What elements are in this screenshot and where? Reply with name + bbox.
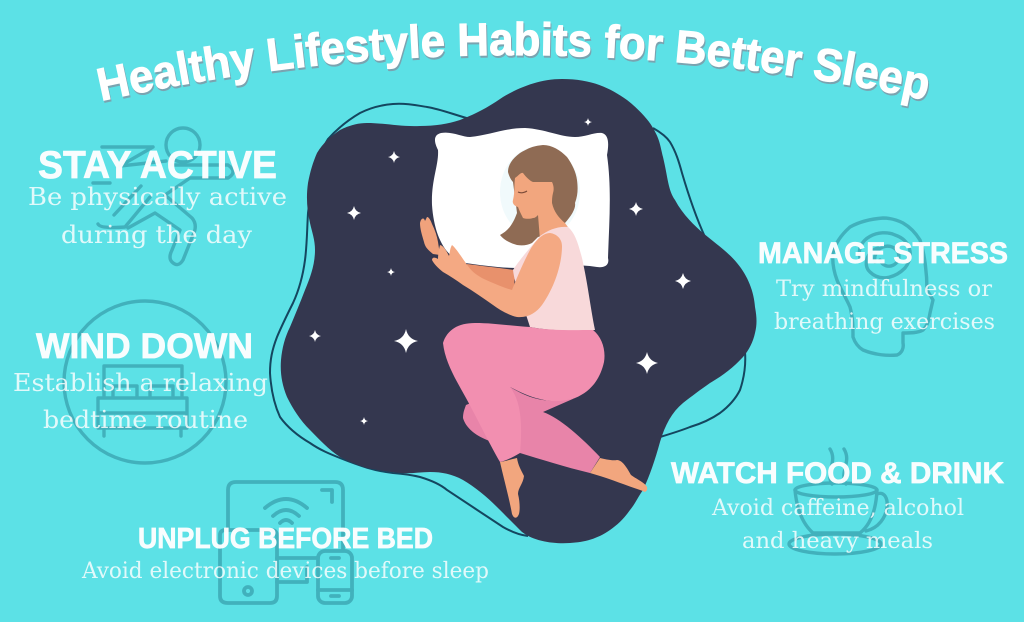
block: wind down: [13, 327, 268, 434]
icon: coffee cup: [789, 449, 887, 554]
block: manage stress: MANAGE STRESS: [758, 237, 1008, 270]
block: stay active: [28, 144, 287, 249]
block: watch food and drink: Avoid caffeine, alcohol: [711, 496, 964, 521]
icon: head with spiral mind: [833, 218, 933, 355]
far leg: [463, 387, 600, 473]
icon: tablet and phones: [220, 482, 352, 603]
block: unplug before bed: [81, 523, 489, 584]
block: watch food and drink: WATCH FOOD & DRINK: [671, 457, 1004, 490]
block: wind down: WIND DOWN: [36, 327, 253, 366]
hair: [500, 145, 578, 245]
pillow: [432, 128, 610, 268]
block: stay active: Be physically active: [28, 183, 287, 211]
block: manage stress: breathing exercises: [774, 310, 995, 335]
block: unplug before bed: UNPLUG BEFORE BED: [138, 523, 433, 555]
icon: bed in circle: [64, 301, 226, 463]
block: stay active: during the day: [61, 221, 252, 249]
far forearm: [467, 264, 515, 292]
thin outline swirl right: [653, 128, 745, 437]
block: watch food and drink: [671, 457, 1004, 554]
block: wind down: bedtime routine: [43, 406, 248, 434]
woman sleeping: [432, 145, 647, 518]
title: Healthy Lifestyle Habits for Better Sleep: [96, 21, 930, 108]
foot lower: [500, 458, 524, 518]
block: manage stress: [758, 237, 1008, 335]
dark night blob: [281, 79, 756, 543]
block: manage stress: Try mindfulness or: [776, 277, 992, 302]
soft glow around head: [500, 146, 580, 238]
face and neck: [513, 173, 570, 240]
icon: runner: [93, 128, 233, 265]
block: stay active: STAY ACTIVE: [38, 144, 277, 187]
top: [513, 227, 595, 331]
near arm and hand: [432, 233, 562, 317]
block: wind down: Establish a relaxing: [13, 369, 268, 397]
foot right: [590, 458, 647, 492]
closed eye: [518, 191, 527, 193]
block: unplug before bed: Avoid electronic devices before sleep: [81, 559, 489, 584]
stars: [309, 118, 691, 425]
far hand behind pillow: [420, 217, 440, 255]
thin outline swirl: [270, 104, 528, 536]
near leg and hips: [443, 323, 605, 462]
block: watch food and drink: and heavy meals: [742, 529, 933, 554]
